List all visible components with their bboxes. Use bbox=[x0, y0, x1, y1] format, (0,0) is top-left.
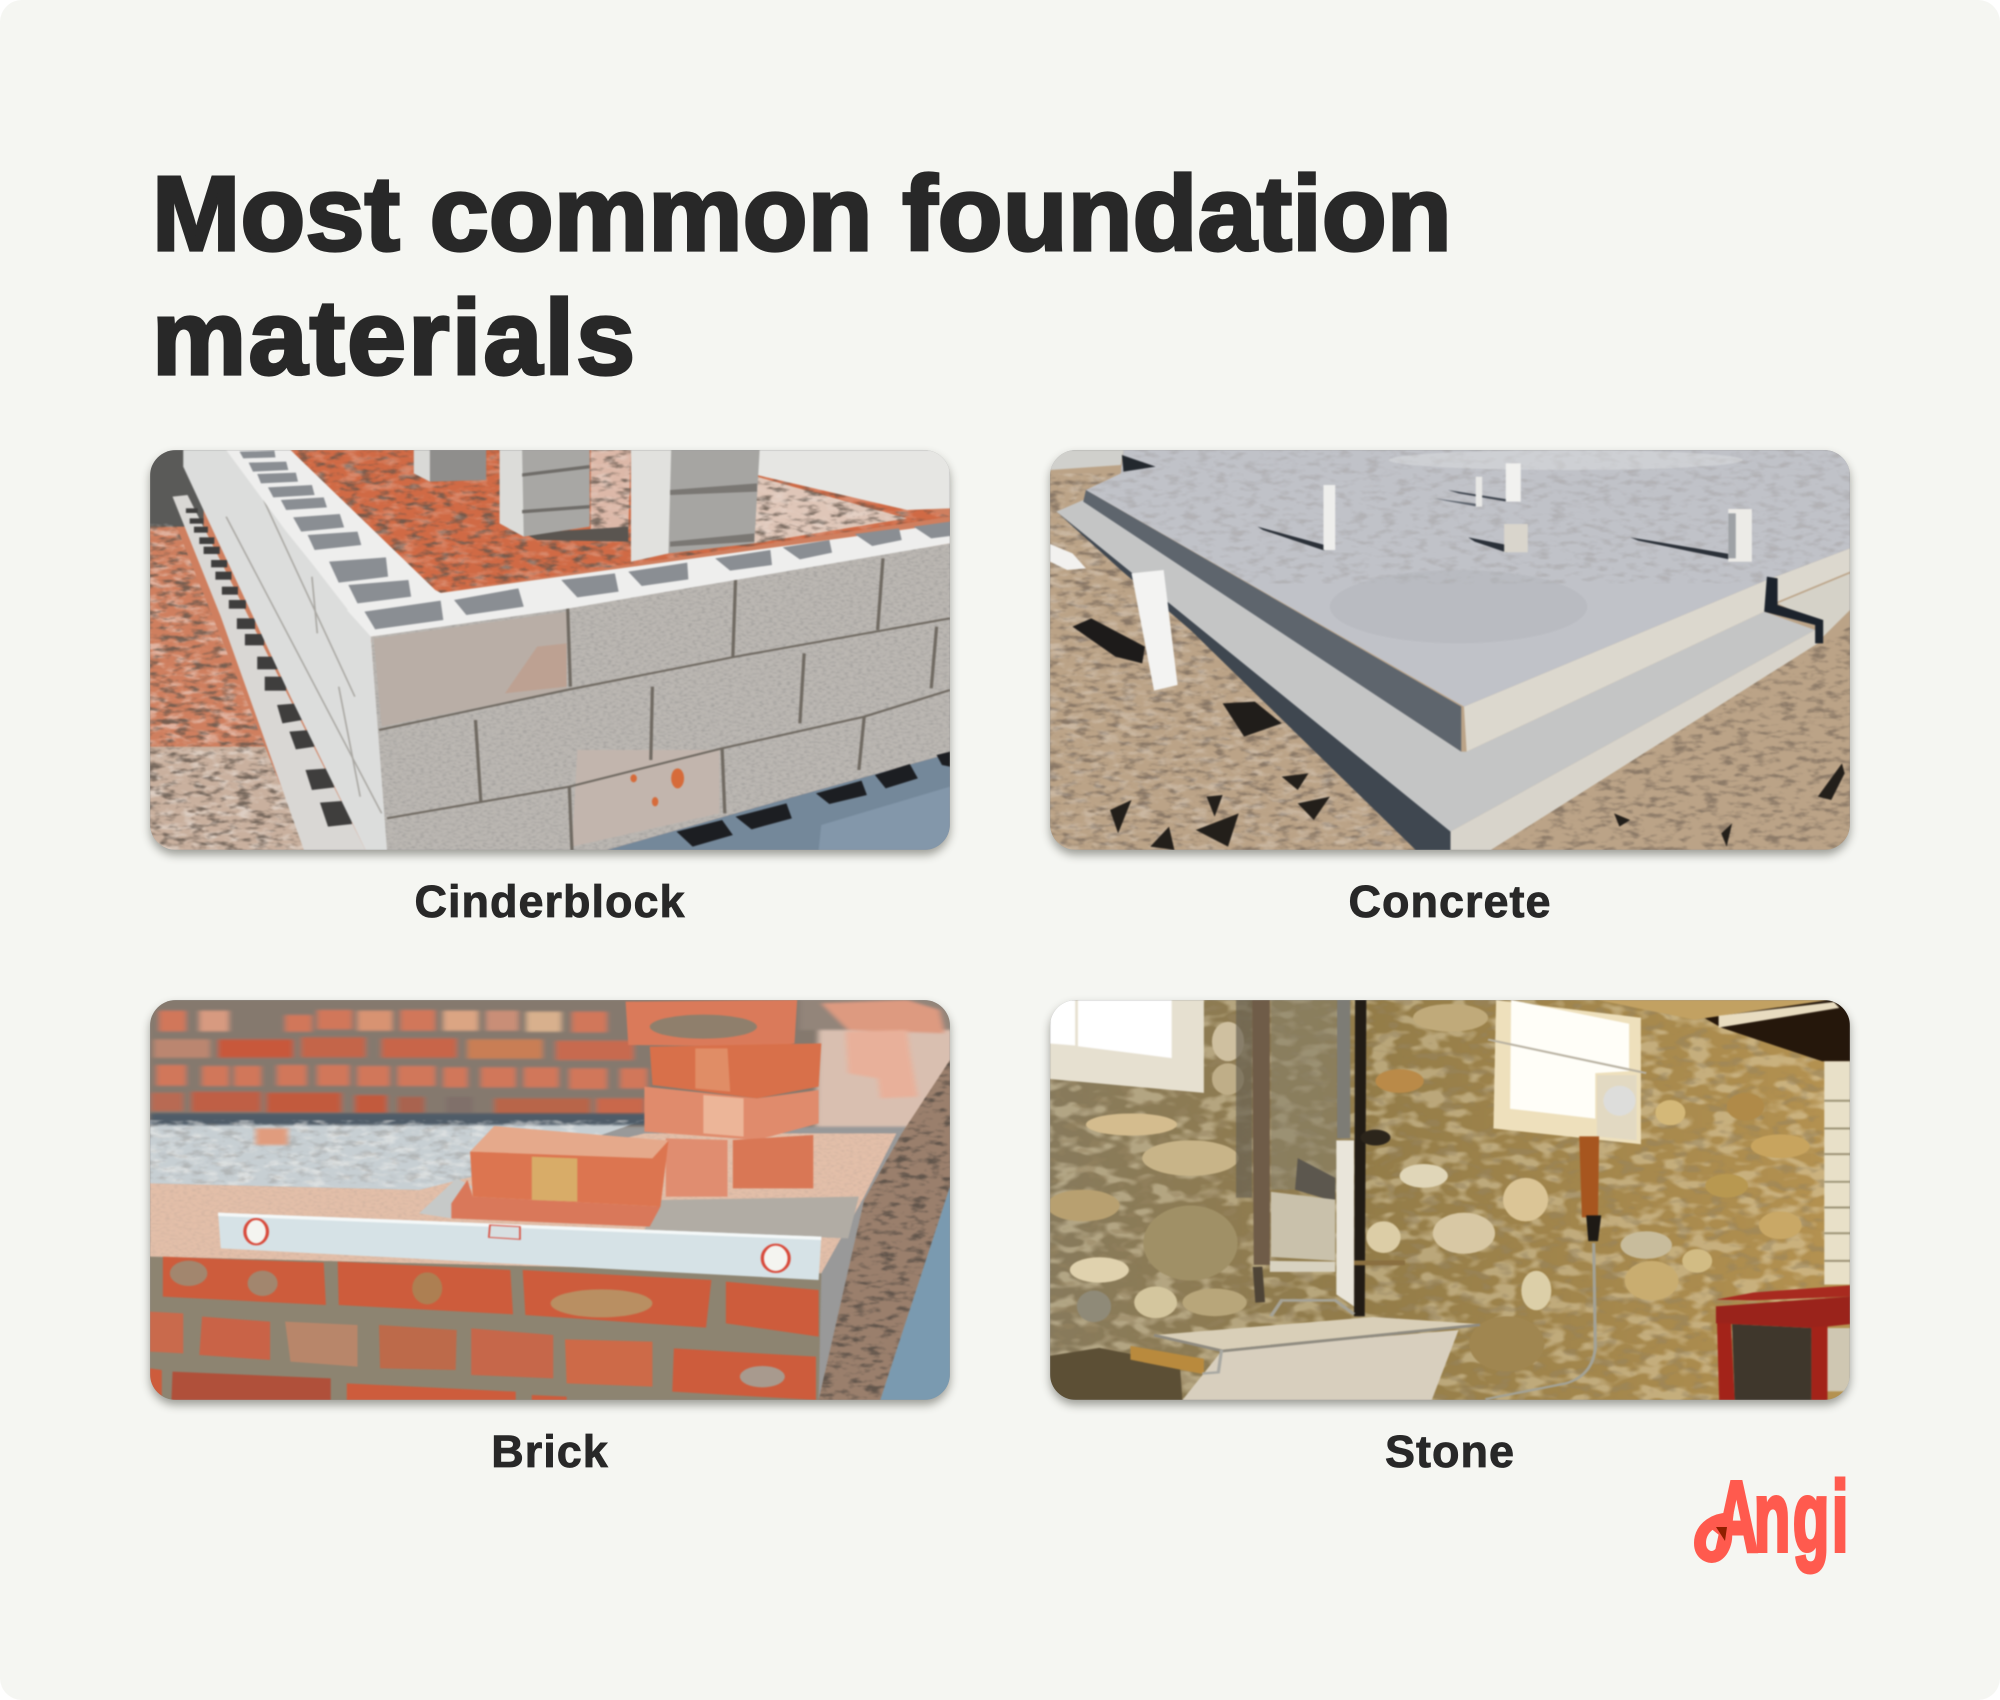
second low block wall bbox=[173, 495, 366, 850]
utility sink bbox=[1130, 1317, 1480, 1400]
wall top surface bbox=[150, 1133, 901, 1273]
slab top bbox=[1086, 450, 1850, 707]
red-brown bar and conduit bbox=[1485, 1136, 1601, 1399]
stone wall bbox=[1050, 1000, 1850, 1400]
pipes with shadows bbox=[1258, 463, 1752, 562]
ceiling joists bbox=[1598, 1000, 1850, 1061]
foreground white pipe bbox=[1132, 570, 1178, 691]
title bbox=[152, 155, 1452, 397]
label: cinderblock: Cinderblock bbox=[414, 876, 686, 927]
large stones bbox=[1047, 1004, 1810, 1372]
white wall at right bbox=[1824, 1061, 1850, 1285]
left wall mortar lines bbox=[226, 500, 382, 813]
blurred back wall bbox=[146, 997, 955, 1127]
dark bottom left bbox=[1050, 1348, 1182, 1400]
logo: Angi: Angi bbox=[1715, 1461, 1848, 1573]
far footing right bbox=[1778, 573, 1850, 637]
front bricks bbox=[150, 1257, 821, 1400]
pipes bbox=[1252, 1000, 1405, 1316]
lower footing front bbox=[1451, 630, 1818, 850]
label: stone: Stone bbox=[1385, 1426, 1515, 1477]
panel: cinderblock photo bbox=[150, 450, 950, 850]
pipe at left edge bbox=[1050, 544, 1086, 570]
left window bbox=[1050, 1000, 1204, 1093]
red table bbox=[1716, 1285, 1850, 1400]
title: materials bbox=[152, 279, 637, 397]
left wall top with holes bbox=[226, 450, 442, 637]
slab light side bbox=[1464, 548, 1850, 752]
pillars bbox=[414, 450, 760, 562]
lower blocks with dark openings bbox=[607, 752, 950, 850]
right window bbox=[1488, 1000, 1646, 1144]
loose bricks on wall bbox=[451, 1126, 668, 1227]
label: brick: Brick bbox=[491, 1426, 609, 1477]
panel: concrete photo bbox=[1050, 450, 1850, 850]
title: Most common foundation bbox=[152, 155, 1452, 273]
top-left corner notch bbox=[1050, 450, 1156, 472]
outer ground bbox=[150, 450, 950, 850]
corner shadow bbox=[1764, 577, 1823, 643]
front wall top with holes bbox=[347, 522, 950, 637]
front wall courses bbox=[371, 543, 950, 850]
panel: brick photo bbox=[150, 1000, 950, 1400]
lower footing top bbox=[1056, 500, 1815, 832]
left wall face bbox=[183, 450, 388, 850]
soil bbox=[1050, 450, 1850, 850]
slab dark side bbox=[1083, 490, 1461, 752]
blurred ground band bbox=[150, 1113, 654, 1190]
inner orange ground bbox=[290, 450, 950, 597]
panel: stone photo bbox=[1050, 1000, 1850, 1400]
grey masonry patch bbox=[1236, 1000, 1336, 1272]
back wall bbox=[757, 450, 950, 510]
spirit level bbox=[218, 1213, 821, 1280]
right side of wall bbox=[819, 1060, 950, 1400]
label: concrete: Concrete bbox=[1348, 876, 1552, 927]
lower footing dark side bbox=[1056, 512, 1451, 850]
blue ground right bbox=[880, 1187, 950, 1400]
logo swoosh bbox=[1700, 1519, 1733, 1557]
brick stack bbox=[626, 1000, 821, 1197]
